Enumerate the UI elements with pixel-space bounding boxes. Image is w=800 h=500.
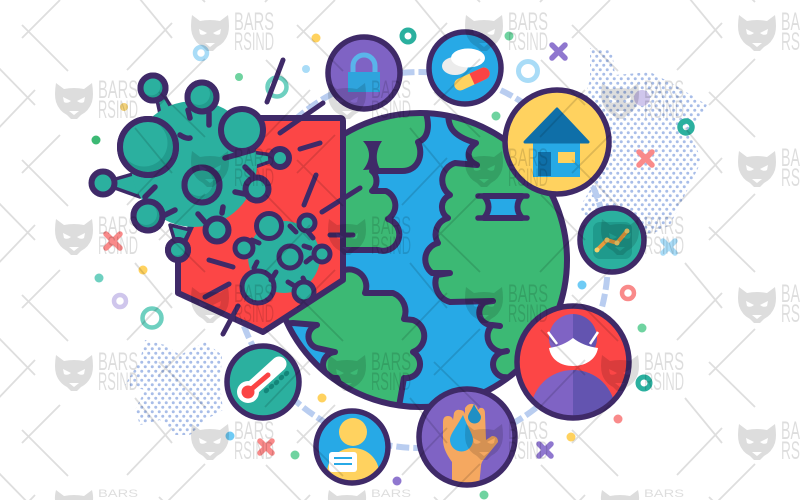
watermark logos: BARS [98,76,138,104]
watermark logos: RSIND [508,300,548,328]
watermark logos: RSIND [234,28,274,56]
watermark logos: RSIND [371,368,411,396]
icon: growth chart [580,208,644,272]
dashed orbit ring [232,72,608,448]
watermark logos: BARS [98,348,138,376]
watermark logos: BARS [234,144,274,172]
watermark logos: RSIND [644,96,684,124]
virus stems [112,97,272,242]
watermark logos: BARS [508,144,548,172]
watermark logos: RSIND [508,437,548,465]
watermark logos: RSIND [234,437,274,465]
watermark logos: BARS [371,76,411,104]
watermark logos: RSIND [508,164,548,192]
watermark logos: BARS [371,348,411,376]
watermark logos: RSIND [371,96,411,124]
small virus spikes [235,214,330,303]
watermark logos: BARS [371,488,411,500]
small virus body [248,221,320,293]
halftone blob: upper right [578,48,707,240]
watermark logos: BARS [508,8,548,36]
virus body [131,101,257,227]
icon: pills [429,32,501,104]
watermark logos: RSIND [98,96,138,124]
watermark logos: RSIND [98,368,138,396]
decorative confetti [92,30,692,500]
watermark logos: RSIND [98,232,138,260]
watermark logos: BARS [508,417,548,445]
watermark logos: BARS [371,212,411,240]
virus stubs [145,110,253,222]
watermark logos: RSIND [508,28,548,56]
virus spikes [92,76,289,260]
watermark logos: BARS [234,417,274,445]
watermark logos: BARS [644,76,684,104]
watermark logos: BARS [98,488,138,500]
icon: thermometer [227,346,299,418]
watermark logos: BARS [644,348,684,376]
continent notch [363,141,382,170]
watermark logos: RSIND [234,300,274,328]
red shield [178,118,343,332]
watermark logos: BARS [234,280,274,308]
watermark logos: RSIND [644,232,684,260]
watermark logos: BARS [234,8,274,36]
halftone blob: lower left [125,340,223,435]
icon: house [505,90,609,194]
icon: person with mask [514,303,632,421]
continent: lower left [288,266,428,403]
watermark logos: BARS [508,280,548,308]
watermark logos: BARS [644,212,684,240]
globe [284,110,570,410]
small virus [235,214,330,303]
icon: hand with water drops [419,389,515,486]
continent: right [422,118,564,380]
icon: lock [328,37,400,109]
watermark logos: RSIND [371,232,411,260]
icon: person profile card [316,411,388,498]
watermark logos: RSIND [234,164,274,192]
watermark logos: RSIND [644,368,684,396]
motion dashes [205,60,360,334]
continent: upper left [346,116,431,254]
watermark logos: BARS [98,212,138,240]
small virus stubs [252,226,313,285]
large virus [92,76,289,260]
watermark logos: BARS [644,488,684,500]
inland lake [484,196,522,218]
